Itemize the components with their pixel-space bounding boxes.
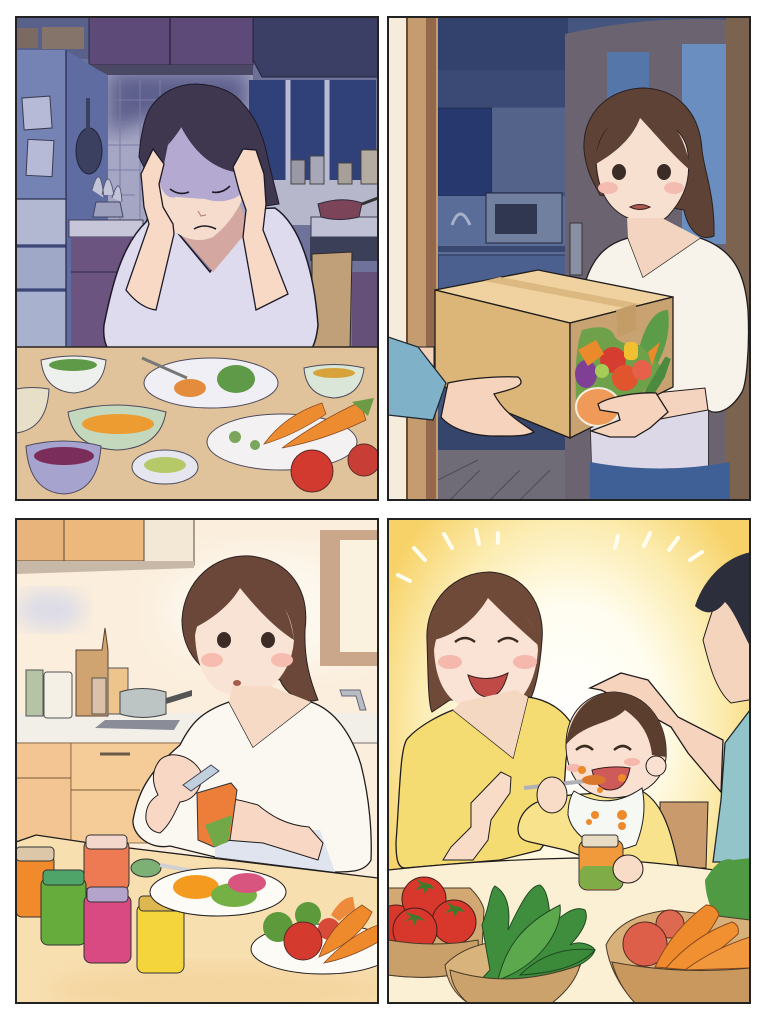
sunburst rays [398, 530, 702, 581]
chair [312, 252, 352, 350]
woman with jar [133, 556, 371, 872]
chair [660, 802, 708, 868]
panel border 4 [388, 519, 750, 1003]
table [16, 347, 378, 500]
tomato basket [389, 876, 484, 978]
baby food jar [579, 835, 643, 890]
panel: delivery at the door [388, 17, 750, 500]
woman's hand on box [591, 393, 668, 437]
panel: happy family feeding baby [376, 519, 760, 1003]
plate of purees [150, 868, 286, 916]
table [389, 857, 713, 1002]
woman with head in hands [104, 84, 318, 360]
delivery person hands [388, 337, 534, 436]
sunny background [389, 520, 749, 870]
father [590, 552, 760, 862]
panel: mother inspecting a jar [15, 519, 395, 1016]
table [16, 835, 378, 1003]
row of colourful jars [16, 835, 192, 973]
woman receiving box [584, 88, 749, 500]
panel: exhausted mother in the kitchen [16, 17, 380, 500]
dishes with purees [16, 356, 380, 494]
baby with bib [518, 692, 678, 874]
panel border 2 [388, 17, 750, 500]
panel border 1 [16, 17, 378, 500]
plate of vegetables [250, 897, 377, 974]
mother in yellow [396, 572, 572, 868]
spinach basket [445, 885, 595, 1003]
panel border 3 [16, 519, 378, 1003]
cardboard box with vegetables [435, 270, 673, 438]
bright kitchen background [17, 520, 377, 878]
kitchen background [16, 17, 378, 352]
vegetables in box opening [575, 310, 669, 426]
dark hallway background [388, 17, 750, 500]
carrot basket [606, 858, 751, 1003]
